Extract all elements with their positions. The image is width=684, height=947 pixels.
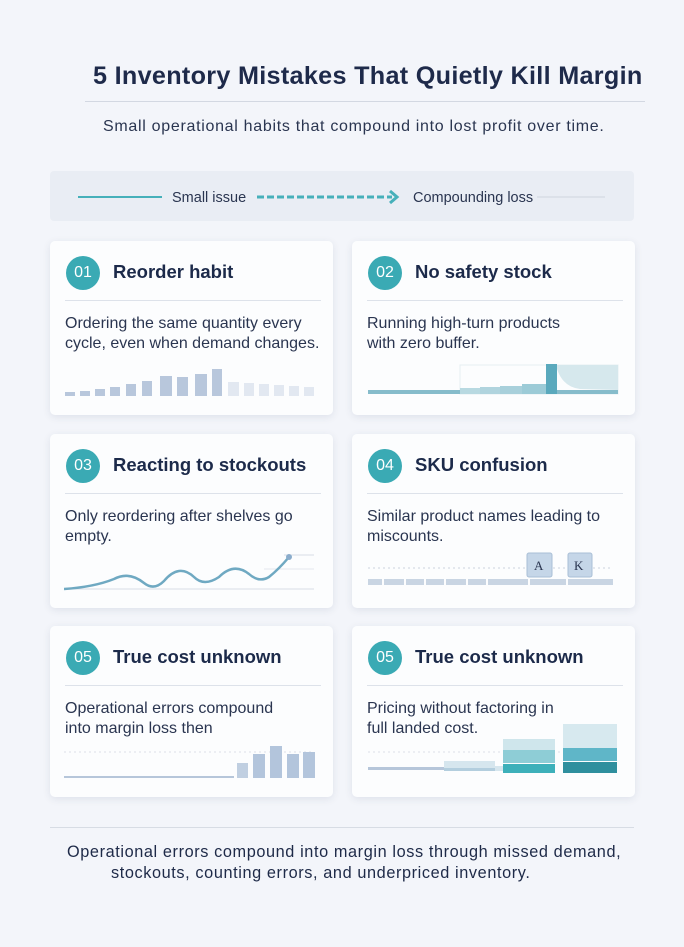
footer text: stockouts, counting errors, and underpriced inventory. [111,864,530,882]
card 05 right: 05 [376,649,394,666]
card 05 left: Operational errors compound [65,700,273,717]
card 04: 04 [376,457,394,474]
card 01: cycle, even when demand changes. [65,335,319,352]
card 02: Running high-turn products [367,315,560,332]
title: 5 Inventory Mistakes That Quietly Kill Margin [93,62,643,90]
card 04: miscounts. [367,528,443,545]
chart: sku labels: K [574,558,584,573]
card 04: Similar product names leading to [367,508,600,525]
chart: stock level [368,364,618,394]
card 05 left: into margin loss then [65,720,213,737]
chart: sku labels [368,552,613,585]
card 05 right: full landed cost. [367,720,478,737]
banner: small issue to compounding loss: Compounding loss [413,190,533,206]
chart: sku labels: A [534,558,544,573]
card 03: 03 [74,457,92,474]
card 02: with zero buffer. [367,335,480,352]
footer text: Operational errors compound into margin loss through missed demand, [67,843,621,861]
banner: small issue to compounding loss [50,171,634,221]
footer text [67,843,621,882]
card 01 [50,241,333,415]
card 02 [352,241,635,415]
banner: small issue to compounding loss: Small issue [172,190,246,206]
card 04 [352,434,635,608]
card 01: Reorder habit [113,261,233,282]
card 03: empty. [65,528,112,545]
card 05 left [50,626,333,797]
subtitle: Small operational habits that compound into lost profit over time. [103,118,605,135]
chart: stacked cost bars [368,724,617,773]
card 05 left: True cost unknown [113,646,282,667]
card 01: Ordering the same quantity every [65,315,302,332]
chart: rising bars [64,746,315,778]
card 03: Reacting to stockouts [113,454,306,475]
card 02: No safety stock [415,261,552,282]
card 02: 02 [376,264,394,281]
card 04: SKU confusion [415,454,548,475]
card 05 right: Pricing without factoring in [367,700,554,717]
chart: wave [64,554,314,590]
chart: bars [65,369,314,396]
card 03: Only reordering after shelves go [65,508,293,525]
card 05 right: True cost unknown [415,646,584,667]
card 03 [50,434,333,608]
card 01: 01 [74,264,92,281]
card 05 right [352,626,635,797]
card 05 left: 05 [74,649,92,666]
